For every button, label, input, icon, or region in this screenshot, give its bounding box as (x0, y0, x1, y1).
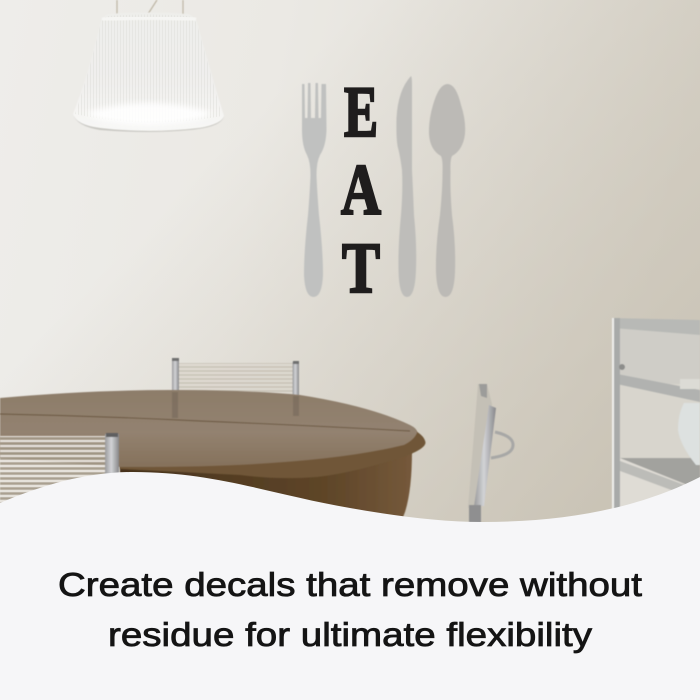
decal letters: EAT: T (342, 228, 380, 308)
front chair (0, 433, 119, 506)
shelf bars (613, 318, 700, 335)
icon: knife (396, 76, 416, 297)
right chair (468, 384, 513, 525)
icon: fork (302, 83, 326, 297)
white wave caption panel (0, 472, 700, 700)
vase (678, 403, 700, 465)
decal letters: EAT (341, 72, 381, 308)
decal letters: EAT: E (344, 72, 378, 152)
wall decal: EAT cutlery (302, 72, 465, 308)
dining table (0, 390, 426, 525)
decal letters: EAT: A (341, 150, 381, 230)
table seam and chair reflections (0, 392, 410, 431)
caption heading: Create decals that remove without (58, 566, 642, 603)
shelf panel (618, 326, 700, 386)
table top (0, 390, 417, 467)
back chair (172, 358, 299, 398)
table base (120, 450, 412, 525)
table rim (120, 430, 426, 478)
pendant lamp (73, 0, 224, 132)
photo: dining room wall (0, 0, 700, 540)
metal shelf unit (612, 318, 700, 528)
icon: spoon (429, 84, 465, 297)
caption heading (58, 566, 642, 653)
shelf knob (619, 364, 625, 370)
caption heading: residue for ultimate flexibility (108, 616, 593, 653)
